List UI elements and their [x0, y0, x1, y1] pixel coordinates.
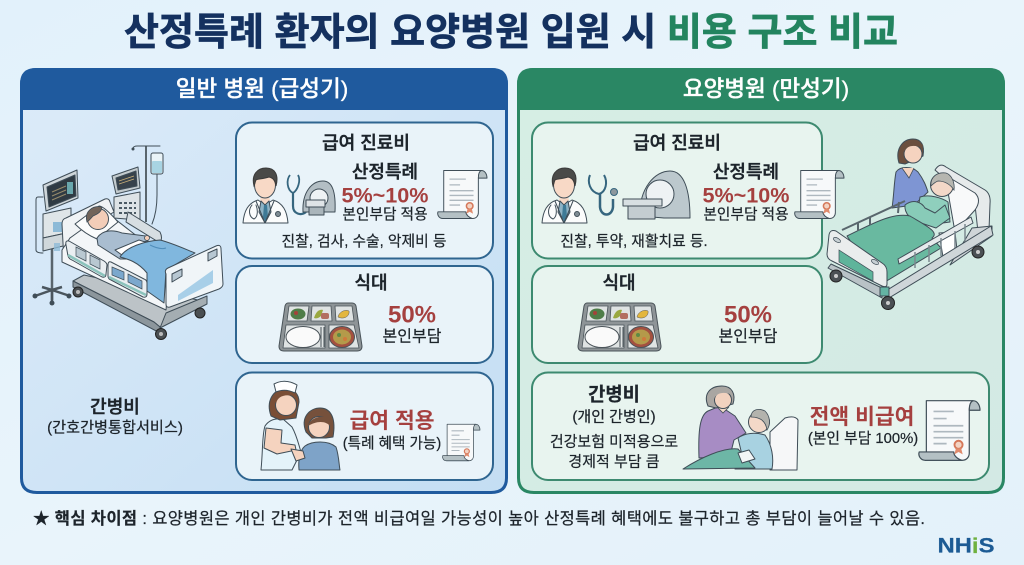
- label: left caregiver fee: (간호간병통합서비스): [47, 420, 183, 436]
- panel: left card - covered medical fees: [236, 122, 493, 258]
- panel: right card - covered medical fees: [532, 122, 844, 258]
- blanket: [847, 215, 957, 285]
- panel: left card - meals: [236, 266, 493, 363]
- panel header: general hospital: [20, 68, 508, 110]
- text: private caregiver: 건강보험 미적용으로: [550, 434, 678, 450]
- text: fully uncovered: 전액 비급여: [810, 405, 914, 429]
- left monitor stand: [32, 170, 78, 306]
- panel: right card - meals: [532, 266, 822, 363]
- text: covered: [343, 409, 441, 452]
- text: private caregiver: (개인 간병인): [572, 408, 656, 426]
- rear monitor: [112, 167, 140, 220]
- panel: right card - private caregiver: [532, 372, 989, 480]
- text: 50%: 본인부담: [383, 328, 442, 346]
- text: special case rate: 5%~10%: [341, 182, 429, 208]
- text: fully uncovered: (본인 부담 100%): [808, 430, 918, 447]
- text: 50%: 50%: [388, 302, 436, 328]
- panel header: nursing hospital: [517, 68, 1005, 110]
- icon: hospital bed with patient and monitors: [32, 146, 223, 340]
- far side rail: [126, 212, 162, 243]
- text: 50%: [719, 302, 778, 346]
- text: special case rate: [341, 162, 429, 223]
- icon: doctor: [243, 168, 288, 223]
- icon: stethoscope: [589, 175, 618, 214]
- icon: elderly couple: [683, 386, 798, 470]
- text: private caregiver: [550, 384, 678, 470]
- title: 산정특례 환자의 요양병원 입원 시 비용 구조 비교: [124, 12, 898, 54]
- panel: nursing hospital: [517, 68, 1005, 492]
- text: special case rate: 본인부담 적용: [703, 206, 789, 223]
- patient: [86, 207, 150, 259]
- icon: nurse with patient: [261, 381, 340, 470]
- text: 50%: 본인부담: [719, 328, 778, 346]
- bed base: [73, 275, 207, 340]
- panel: left card - nursing care: [236, 372, 493, 480]
- icon: doctor: [542, 168, 587, 223]
- icon: document: [443, 424, 480, 461]
- text: covered: 급여 적용: [349, 409, 435, 433]
- text: special case rate: 산정특례: [713, 162, 779, 182]
- text: items: 진찰, 투약, 재활치료 등.: [560, 233, 708, 250]
- text: special case rate: 본인부담 적용: [342, 206, 428, 223]
- headboard: [935, 165, 992, 265]
- text: special case rate: 산정특례: [352, 162, 418, 182]
- icon: MRI scanner: [303, 181, 335, 215]
- heading: 급여 진료비: [633, 133, 721, 153]
- icon: document: [919, 401, 980, 460]
- label: left caregiver fee: [47, 397, 183, 436]
- text: private caregiver: 간병비: [588, 384, 640, 404]
- text: special case rate: 5%~10%: [702, 182, 790, 208]
- mattress, headboard and pillow: [62, 199, 170, 310]
- icon: meal tray: [279, 303, 362, 351]
- panel header: nursing hospital: 요양병원 (만성기): [683, 76, 849, 102]
- text: private caregiver: 경제적 부담 큼: [568, 454, 660, 470]
- icon: meal tray: [578, 303, 661, 351]
- icon: document: [438, 170, 487, 219]
- label: left caregiver fee: 간병비: [90, 397, 140, 417]
- panel: general hospital: [20, 68, 508, 492]
- text: fully uncovered: [808, 405, 918, 447]
- IV pole: [132, 146, 163, 224]
- heading: 급여 진료비: [322, 133, 410, 153]
- heading: 식대: [602, 273, 636, 293]
- bed rails: [66, 241, 147, 297]
- icon: document: [795, 170, 844, 219]
- text: special case rate: [702, 162, 790, 223]
- icon: MRI scanner: [623, 171, 690, 219]
- patient: [905, 173, 954, 228]
- heading: 식대: [354, 273, 388, 293]
- footboard: [827, 230, 887, 287]
- text: 50%: [383, 302, 442, 346]
- text: items: 진찰, 검사, 수술, 악제비 등: [282, 233, 446, 250]
- logo: NHIS: NHiS: [938, 534, 994, 558]
- icon: stethoscope: [288, 175, 306, 214]
- text: covered: (특례 혜택 가능): [343, 435, 441, 452]
- frame and wheels: [828, 226, 993, 310]
- panel header: general hospital: 일반 병원 (급성기): [176, 76, 348, 102]
- key difference note: ★ 핵심 차이점 : 요양병원은 개인 간병비가 전액 비급여일 가능성이 높아 산정특례 혜택에도 불구하고 총 부담이 늘어날 수 있음.: [33, 509, 925, 528]
- side rails: [842, 201, 973, 268]
- footboard: [165, 245, 223, 307]
- blanket: [120, 240, 195, 303]
- icon: nursing bed with carer: [827, 139, 993, 310]
- carer: [892, 139, 928, 208]
- text: 50%: 50%: [724, 302, 772, 328]
